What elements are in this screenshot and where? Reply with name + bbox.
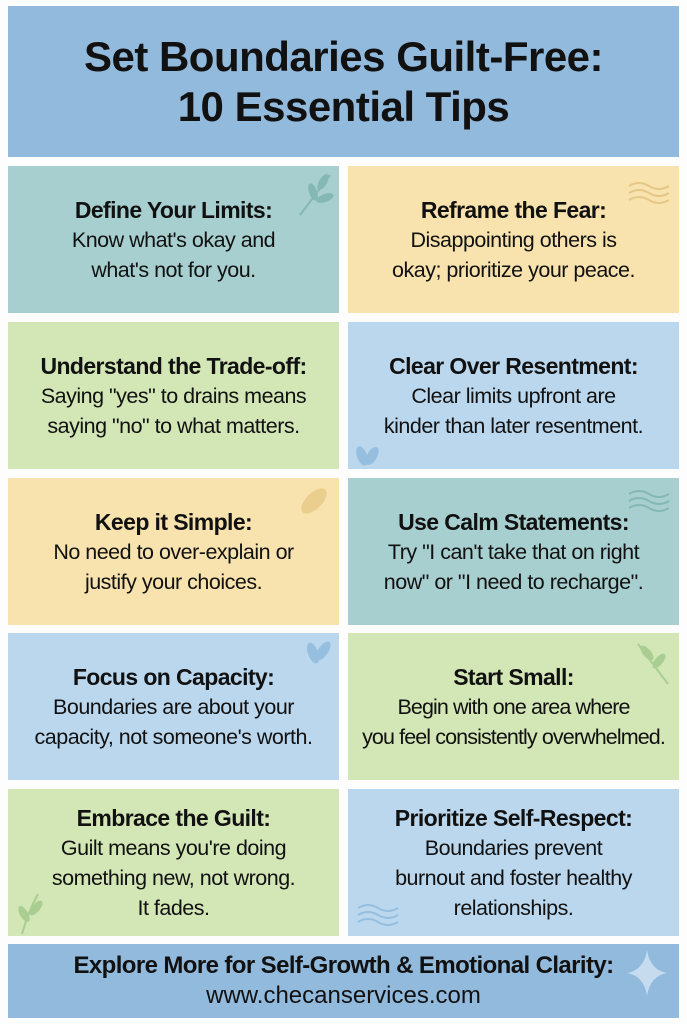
panel: calm statements: now" or "I need to recharge". (384, 570, 643, 594)
panel: self-respect: burnout and foster healthy (395, 866, 632, 890)
panel: clear over resentment: Clear Over Resentment: (389, 352, 638, 378)
panel: reframe fear: Reframe the Fear: (421, 196, 606, 222)
panel: clear over resentment (348, 322, 679, 469)
panel: keep it simple: Keep it Simple: (95, 508, 252, 534)
icon: waves (358, 904, 398, 926)
panel: trade-off (8, 322, 339, 469)
title (8, 6, 679, 157)
panel: trade-off: Saying "yes" to drains means (41, 384, 306, 408)
panel: embrace guilt: something new, not wrong. (52, 866, 295, 890)
title: 10 Essential Tips (178, 82, 509, 130)
panel: start small: Begin with one area where (397, 694, 630, 718)
panel: define limits: what's not for you. (91, 258, 256, 282)
panel: self-respect (348, 789, 679, 936)
footer: Explore More for Self-Growth & Emotional Clarity: (74, 952, 614, 979)
panel: clear over resentment: kinder than later resentment. (384, 414, 643, 438)
panel: capacity (8, 633, 339, 780)
icon: leaf (301, 488, 327, 514)
panel: start small: Start Small: (453, 664, 574, 690)
panel: calm statements: Try "I can't take that on right (388, 540, 639, 564)
panel: embrace guilt: Embrace the Guilt: (77, 804, 270, 830)
panel: capacity: Focus on Capacity: (73, 664, 274, 690)
panel: reframe fear: Disappointing others is (410, 228, 616, 252)
panel: capacity: Boundaries are about your (53, 694, 294, 718)
panel: self-respect: Prioritize Self-Respect: (395, 804, 632, 830)
panel: embrace guilt: Guilt means you're doing (61, 836, 286, 860)
icon: waves (628, 490, 670, 512)
panel: clear over resentment: Clear limits upfront are (411, 384, 616, 408)
panel: define limits: Know what's okay and (72, 228, 275, 252)
icon: sparkle (628, 950, 666, 996)
icon: leaf (299, 174, 334, 216)
panel: keep it simple: justify your choices. (85, 570, 262, 594)
panel: reframe fear: okay; prioritize your peace. (392, 258, 635, 282)
panel: keep it simple (8, 478, 339, 625)
panel: keep it simple: No need to over-explain or (53, 540, 294, 564)
panel: embrace guilt (8, 789, 339, 936)
icon: leaf (307, 642, 330, 664)
panel: embrace guilt: It fades. (137, 896, 209, 920)
panel: trade-off: saying "no" to what matters. (47, 414, 300, 438)
panel: start small (348, 633, 679, 780)
panel: define limits: Define Your Limits: (75, 196, 272, 222)
title: Set Boundaries Guilt-Free: (84, 32, 603, 80)
icon: leaf (637, 644, 669, 684)
footer (8, 944, 679, 1018)
panel: self-respect: relationships. (454, 896, 573, 920)
icon: leaf (356, 446, 378, 466)
icon: waves (628, 182, 670, 204)
footer: www.checanservices.com (206, 982, 481, 1009)
panel: trade-off: Understand the Trade-off: (40, 352, 307, 378)
panel: start small: you feel consistently overwhelmed. (362, 724, 665, 748)
panel: calm statements (348, 478, 679, 625)
panel: calm statements: Use Calm Statements: (398, 508, 629, 534)
panel: define limits (8, 166, 339, 313)
panel: reframe fear (348, 166, 679, 313)
panel: capacity: capacity, not someone's worth. (35, 724, 312, 748)
icon: leaf (18, 894, 42, 934)
panel: self-respect: Boundaries prevent (425, 836, 602, 860)
